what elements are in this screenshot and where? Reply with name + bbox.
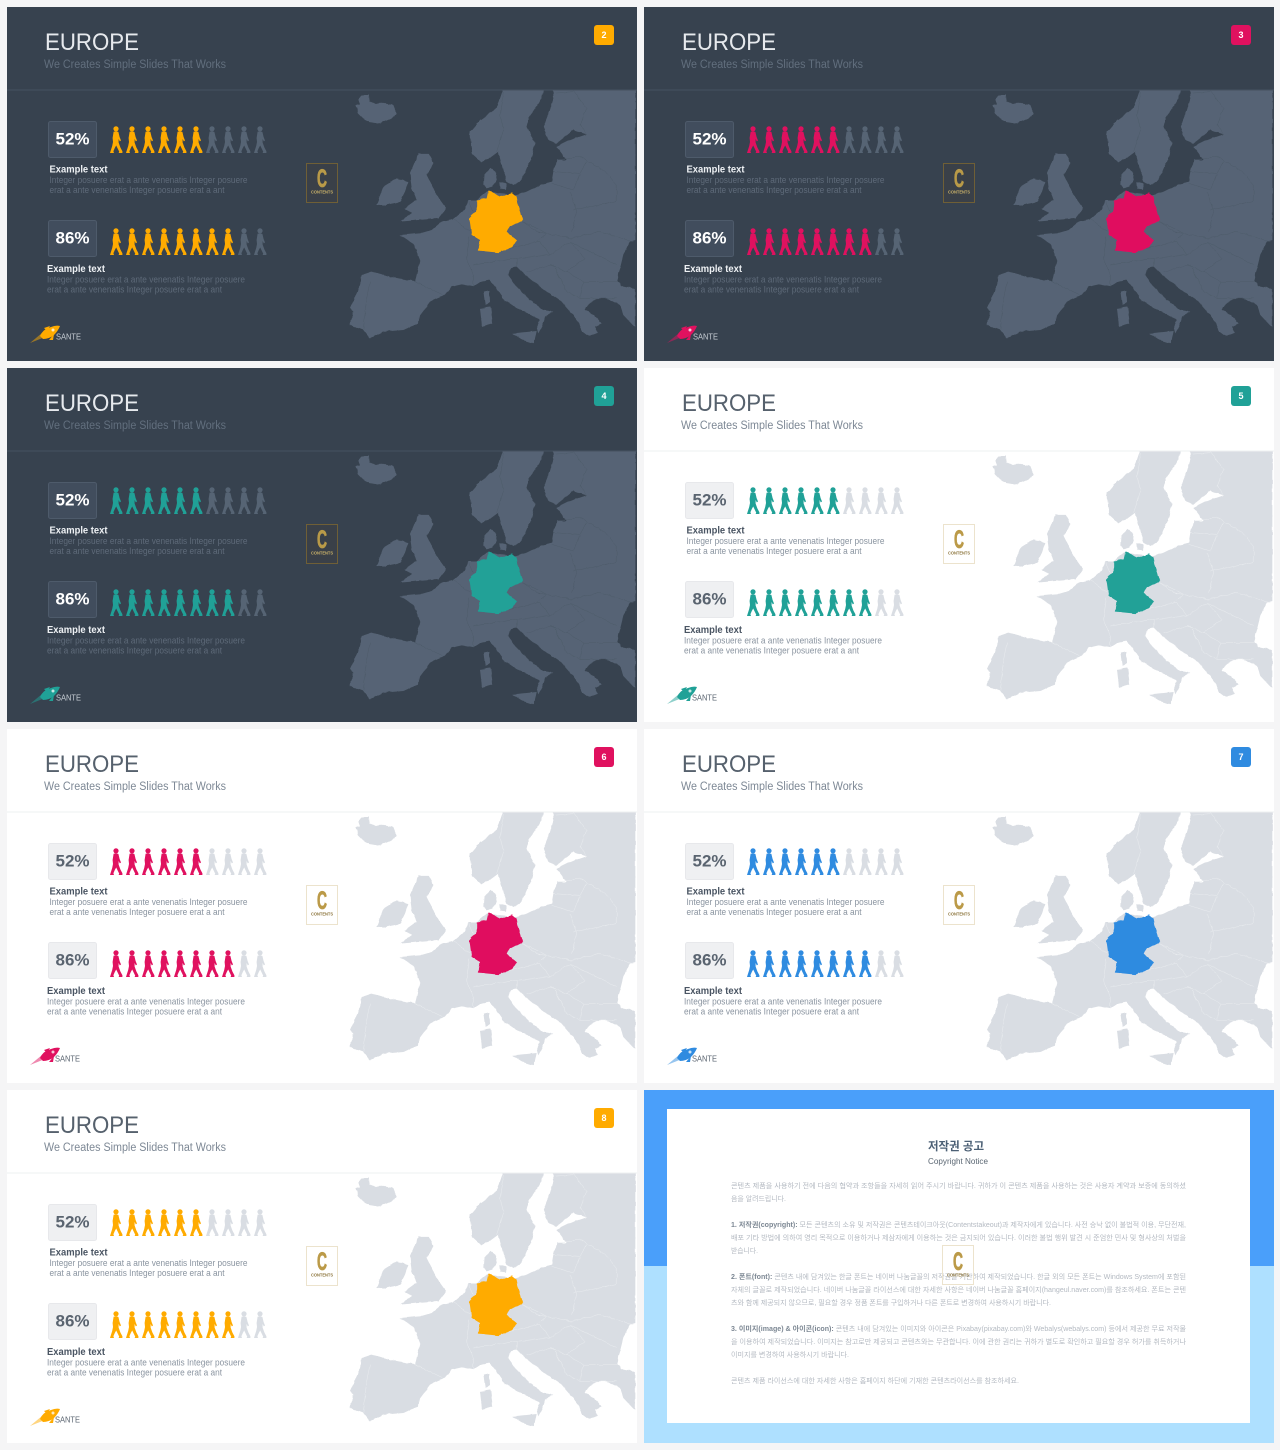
watermark logo: C xyxy=(317,1248,327,1276)
copyright body text: 2. 폰트(font): 콘텐츠 내에 담겨있는 한글 폰트는 네이버 나눔글꼴의 저작권을 기반하여 제작되었습니다. 한글 외의 모든 폰트는 Windows System에 포함된 xyxy=(731,1272,1186,1281)
pictogram row 86% xyxy=(110,950,266,977)
text block 2: Integer posuere erat a ante venenatis Integer posuere xyxy=(47,1358,245,1368)
watermark logo: C xyxy=(317,526,327,554)
brand logo xyxy=(30,326,81,343)
map of Europe with Germany highlighted xyxy=(350,87,635,344)
text block 2: Integer posuere erat a ante venenatis Integer posuere xyxy=(684,996,882,1006)
watermark logo xyxy=(942,1246,974,1284)
copyright body text: 음을 알려드립니다. xyxy=(731,1194,786,1203)
copyright body text: 자체의 글꼴로 제작되었습니다. 네이버 나눔글꼴 라이선스에 대한 자세한 사항은 네이버 나눔글꼴 홈페이지(hangeul.naver.com)를 참조하세요. 폰트는 콘텐 xyxy=(731,1285,1186,1294)
text block 2: erat a ante venenatis Integer posuere erat a ant xyxy=(684,284,859,294)
stat 52%: 52% xyxy=(55,490,90,510)
panel: copyright notice xyxy=(644,1090,1274,1443)
watermark logo xyxy=(944,164,974,202)
text block 2: erat a ante venenatis Integer posuere erat a ant xyxy=(684,1006,859,1016)
text block 1: Example text xyxy=(686,164,745,176)
page number badge xyxy=(594,747,614,767)
text block 2 xyxy=(684,264,882,294)
stat 86% xyxy=(48,582,96,618)
stat 86%: 86% xyxy=(55,950,90,970)
pictogram row 86% xyxy=(110,1311,266,1338)
watermark logo xyxy=(944,886,974,924)
copyright body text: 배포 기타 방법에 의하여 영리 목적으로 이용하거나 제삼자에게 이용하는 것은 금지되어 있습니다. 이러한 불법 행위 발견 시 준엄한 민사 및 형사상의 처벌을 xyxy=(731,1233,1187,1242)
pictogram row 52% xyxy=(747,487,903,514)
brand logo xyxy=(667,687,717,704)
page number badge: 6 xyxy=(601,752,607,762)
page number badge: 4 xyxy=(601,391,607,401)
panel: slide 4 dark teal xyxy=(7,368,637,722)
brand logo: SANTE xyxy=(692,1054,717,1064)
watermark logo: CONTENTS xyxy=(311,190,334,196)
watermark logo xyxy=(306,1246,338,1286)
stat 52%: 52% xyxy=(692,130,727,148)
copyright body text: 1. 저작권(copyright): 모든 콘텐츠의 소유 및 저작권은 콘텐츠테이크아웃(Contentstakeout)과 제작자에게 있습니다. 사전 승낙 없이 불법적 이용, 무단전재, xyxy=(731,1220,1186,1229)
page number badge: 7 xyxy=(1238,752,1244,762)
brand logo: SANTE xyxy=(55,1414,80,1424)
watermark logo xyxy=(306,524,338,564)
text block 1: Example text xyxy=(50,526,108,536)
pictogram row 52% xyxy=(747,848,903,875)
stat 52% xyxy=(686,844,734,880)
text block 1: erat a ante venenatis Integer posuere erat a ant xyxy=(50,185,225,195)
watermark logo: CONTENTS xyxy=(948,190,971,196)
watermark logo xyxy=(306,164,338,202)
panel: slide 7 light blue xyxy=(644,729,1274,1083)
text block 1 xyxy=(686,886,884,917)
text block 2: erat a ante venenatis Integer posuere erat a ant xyxy=(47,646,222,656)
text block 1: Integer posuere erat a ante venenatis Integer posuere xyxy=(686,536,884,546)
page number badge xyxy=(594,25,614,45)
brand logo: SANTE xyxy=(56,692,81,702)
stat 52% xyxy=(686,482,734,518)
watermark logo: C xyxy=(954,887,964,915)
title: EUROPE xyxy=(682,390,776,417)
text block 2: erat a ante venenatis Integer posuere erat a ant xyxy=(47,1006,222,1016)
text block 1: Example text xyxy=(686,526,745,536)
stat 86%: 86% xyxy=(55,590,90,608)
stat 52% xyxy=(48,122,96,158)
text block 2: Example text xyxy=(47,264,106,275)
copyright body text: 콘텐츠 제품을 사용하기 전에 다음의 협약과 조항들을 자세히 읽어 주시기 바랍니다. 귀하가 이 콘텐츠 제품을 사용하는 것은 사용자 계약과 보증에 동의하셨 xyxy=(731,1181,1187,1190)
pictogram row 52% xyxy=(747,126,903,153)
panel: slide 2 dark amber xyxy=(7,7,637,361)
page number badge xyxy=(1231,386,1251,406)
panel: slide 3 dark pink xyxy=(644,7,1274,361)
stat 52%: 52% xyxy=(55,852,90,870)
watermark logo: C xyxy=(317,887,327,915)
copyright body text: 이미지를 변경하여 사용하시기 바랍니다. xyxy=(731,1350,849,1359)
page number badge xyxy=(594,386,614,406)
text block 1 xyxy=(50,886,248,917)
watermark logo: C xyxy=(954,165,964,193)
text block 2: erat a ante venenatis Integer posuere erat a ant xyxy=(47,284,222,294)
subtitle: We Creates Simple Slides That Works xyxy=(681,781,863,793)
watermark logo xyxy=(306,886,338,924)
watermark logo xyxy=(944,524,974,564)
text block 2: Example text xyxy=(684,986,743,997)
pictogram row 52% xyxy=(110,1209,266,1236)
copyright body text: 콘텐츠 제품 라이선스에 대한 자세한 사항은 홈페이지 하단에 기재한 콘텐츠라이선스를 참조하세요. xyxy=(731,1376,1019,1385)
page number badge: 5 xyxy=(1238,391,1244,401)
stat 86% xyxy=(48,942,96,978)
text block 2 xyxy=(47,986,245,1016)
pictogram row 86% xyxy=(110,589,266,616)
stat 86% xyxy=(686,220,734,256)
text block 2: Integer posuere erat a ante venenatis Integer posuere xyxy=(47,996,245,1006)
stat 86%: 86% xyxy=(692,590,727,608)
text block 1 xyxy=(686,526,884,556)
stat 86%: 86% xyxy=(692,950,727,970)
text block 2: Example text xyxy=(47,1347,106,1358)
text block 2 xyxy=(684,986,882,1016)
watermark logo: C xyxy=(317,165,327,193)
text block 2 xyxy=(684,625,882,656)
panel: slide 6 light pink xyxy=(7,729,637,1083)
stat 86% xyxy=(48,220,96,256)
copyright body text: 을 이용하여 제작되었습니다. 이미지는 참고로만 제공되고 콘텐츠와는 무관합니다. 이에 관한 권리는 귀하가 별도로 확인하고 필요할 경우 허가를 취득하거나 xyxy=(731,1337,1187,1346)
copyright body text: 받습니다. xyxy=(731,1246,758,1255)
stat 52% xyxy=(686,122,734,158)
stat 52% xyxy=(48,1204,96,1240)
text block 2: Example text xyxy=(47,986,106,997)
page number badge: 3 xyxy=(1238,30,1244,40)
copyright body text xyxy=(731,1181,1187,1385)
text block 1: Integer posuere erat a ante venenatis Integer posuere xyxy=(50,1258,248,1268)
pictogram row 86% xyxy=(110,228,266,255)
stat 52% xyxy=(48,844,96,880)
stat 52%: 52% xyxy=(692,490,727,510)
text block 2: Integer posuere erat a ante venenatis Integer posuere xyxy=(684,274,882,284)
copyright body text: 츠와 함께 제공되지 않으므로, 필요할 경우 정품 폰트를 구입하거나 다른 폰트로 변경하여 사용하시기 바랍니다. xyxy=(731,1298,1051,1307)
brand logo xyxy=(30,1409,80,1426)
brand logo xyxy=(30,1048,80,1065)
text block 1: Integer posuere erat a ante venenatis Integer posuere xyxy=(686,175,884,185)
brand logo xyxy=(667,1048,717,1065)
stat 52% xyxy=(48,482,96,518)
stat 52%: 52% xyxy=(692,852,727,870)
title: EUROPE xyxy=(45,390,139,417)
text block 1: Integer posuere erat a ante venenatis Integer posuere xyxy=(50,536,248,546)
map of Europe with Germany highlighted xyxy=(987,87,1272,344)
pictogram row 52% xyxy=(110,487,266,514)
text block 1: Example text xyxy=(686,886,745,898)
brand logo xyxy=(30,687,81,704)
watermark logo: CONTENTS xyxy=(311,912,334,918)
title: EUROPE xyxy=(45,1112,139,1139)
text block 1: erat a ante venenatis Integer posuere erat a ant xyxy=(686,546,862,556)
text block 2 xyxy=(47,625,245,656)
text block 1 xyxy=(50,1248,248,1278)
copyright heading xyxy=(928,1139,989,1166)
text block 1: Example text xyxy=(50,1248,108,1258)
map of Europe with Germany highlighted xyxy=(350,448,635,705)
title: EUROPE xyxy=(682,751,776,778)
text block 1: erat a ante venenatis Integer posuere erat a ant xyxy=(50,546,225,556)
text block 1: erat a ante venenatis Integer posuere erat a ant xyxy=(686,907,862,917)
map of Europe with Germany highlighted xyxy=(350,1170,635,1427)
text block 1: erat a ante venenatis Integer posuere erat a ant xyxy=(686,185,862,195)
watermark logo: CONTENTS xyxy=(311,1272,334,1278)
text block 1: Example text xyxy=(50,886,108,898)
title: EUROPE xyxy=(45,751,139,778)
text block 1: erat a ante venenatis Integer posuere erat a ant xyxy=(50,907,225,917)
map of Europe with Germany highlighted xyxy=(987,809,1272,1066)
text block 1: erat a ante venenatis Integer posuere erat a ant xyxy=(50,1268,225,1278)
copyright body text: 3. 이미지(image) & 아이콘(icon): 콘텐츠 내에 담겨있는 이미지와 아이콘은 Pixabay(pixabay.com)와 Webalys(webalys.com) 등에서 제공한 무료 저작물 xyxy=(731,1324,1187,1333)
subtitle: We Creates Simple Slides That Works xyxy=(44,1142,226,1154)
map of Europe with Germany highlighted xyxy=(987,448,1272,705)
watermark logo: CONTENTS xyxy=(947,1272,970,1278)
subtitle: We Creates Simple Slides That Works xyxy=(681,420,863,432)
text block 2 xyxy=(47,264,245,294)
text block 2: Integer posuere erat a ante venenatis Integer posuere xyxy=(684,636,882,646)
map of Europe with Germany highlighted xyxy=(350,809,635,1066)
stat 86% xyxy=(686,582,734,618)
subtitle: We Creates Simple Slides That Works xyxy=(44,420,226,432)
title: EUROPE xyxy=(682,29,776,56)
text block 1: Integer posuere erat a ante venenatis Integer posuere xyxy=(50,175,248,185)
text block 1: Example text xyxy=(50,164,108,176)
pictogram row 86% xyxy=(747,950,903,977)
brand logo xyxy=(667,326,718,343)
text block 1: Integer posuere erat a ante venenatis Integer posuere xyxy=(50,897,248,907)
page number badge: 2 xyxy=(601,30,607,40)
text block 2: erat a ante venenatis Integer posuere erat a ant xyxy=(47,1368,222,1378)
stat 86%: 86% xyxy=(55,228,90,248)
stat 86% xyxy=(686,942,734,978)
subtitle: We Creates Simple Slides That Works xyxy=(681,59,863,71)
watermark logo: CONTENTS xyxy=(948,550,971,556)
panel: slide 5 light teal xyxy=(644,368,1274,722)
copyright heading: Copyright Notice xyxy=(928,1157,989,1166)
brand logo: SANTE xyxy=(692,692,717,702)
pictogram row 52% xyxy=(110,126,266,153)
text block 2: Integer posuere erat a ante venenatis Integer posuere xyxy=(47,636,245,646)
brand logo: SANTE xyxy=(693,332,718,342)
text block 2: Example text xyxy=(47,625,106,636)
text block 1 xyxy=(50,526,248,556)
pictogram row 52% xyxy=(110,848,266,875)
text block 2: erat a ante venenatis Integer posuere erat a ant xyxy=(684,646,859,656)
copyright heading: 저작권 공고 xyxy=(928,1139,984,1153)
text block 2 xyxy=(47,1347,245,1378)
watermark logo: CONTENTS xyxy=(311,550,334,556)
pictogram row 86% xyxy=(747,228,903,255)
text block 2: Example text xyxy=(684,625,743,636)
watermark logo: C xyxy=(954,526,964,554)
stat 86%: 86% xyxy=(55,1312,90,1330)
panel: slide 8 light amber xyxy=(7,1090,637,1443)
text block 1: Integer posuere erat a ante venenatis Integer posuere xyxy=(686,897,884,907)
subtitle: We Creates Simple Slides That Works xyxy=(44,59,226,71)
watermark logo: C xyxy=(953,1248,963,1276)
text block 2: Example text xyxy=(684,264,743,275)
watermark logo: CONTENTS xyxy=(948,912,971,918)
subtitle: We Creates Simple Slides That Works xyxy=(44,781,226,793)
page number badge xyxy=(1231,747,1251,767)
pictogram row 86% xyxy=(747,589,903,616)
stat 52%: 52% xyxy=(55,1212,90,1232)
page number badge xyxy=(1231,25,1251,45)
page number badge xyxy=(594,1108,614,1128)
brand logo: SANTE xyxy=(56,332,81,342)
brand logo: SANTE xyxy=(55,1054,80,1064)
stat 52%: 52% xyxy=(55,130,90,148)
page number badge: 8 xyxy=(601,1113,607,1123)
text block 1 xyxy=(50,164,248,195)
text block 1 xyxy=(686,164,884,195)
title: EUROPE xyxy=(45,29,139,56)
text block 2: Integer posuere erat a ante venenatis Integer posuere xyxy=(47,274,245,284)
stat 86%: 86% xyxy=(692,228,727,248)
stat 86% xyxy=(48,1304,96,1340)
